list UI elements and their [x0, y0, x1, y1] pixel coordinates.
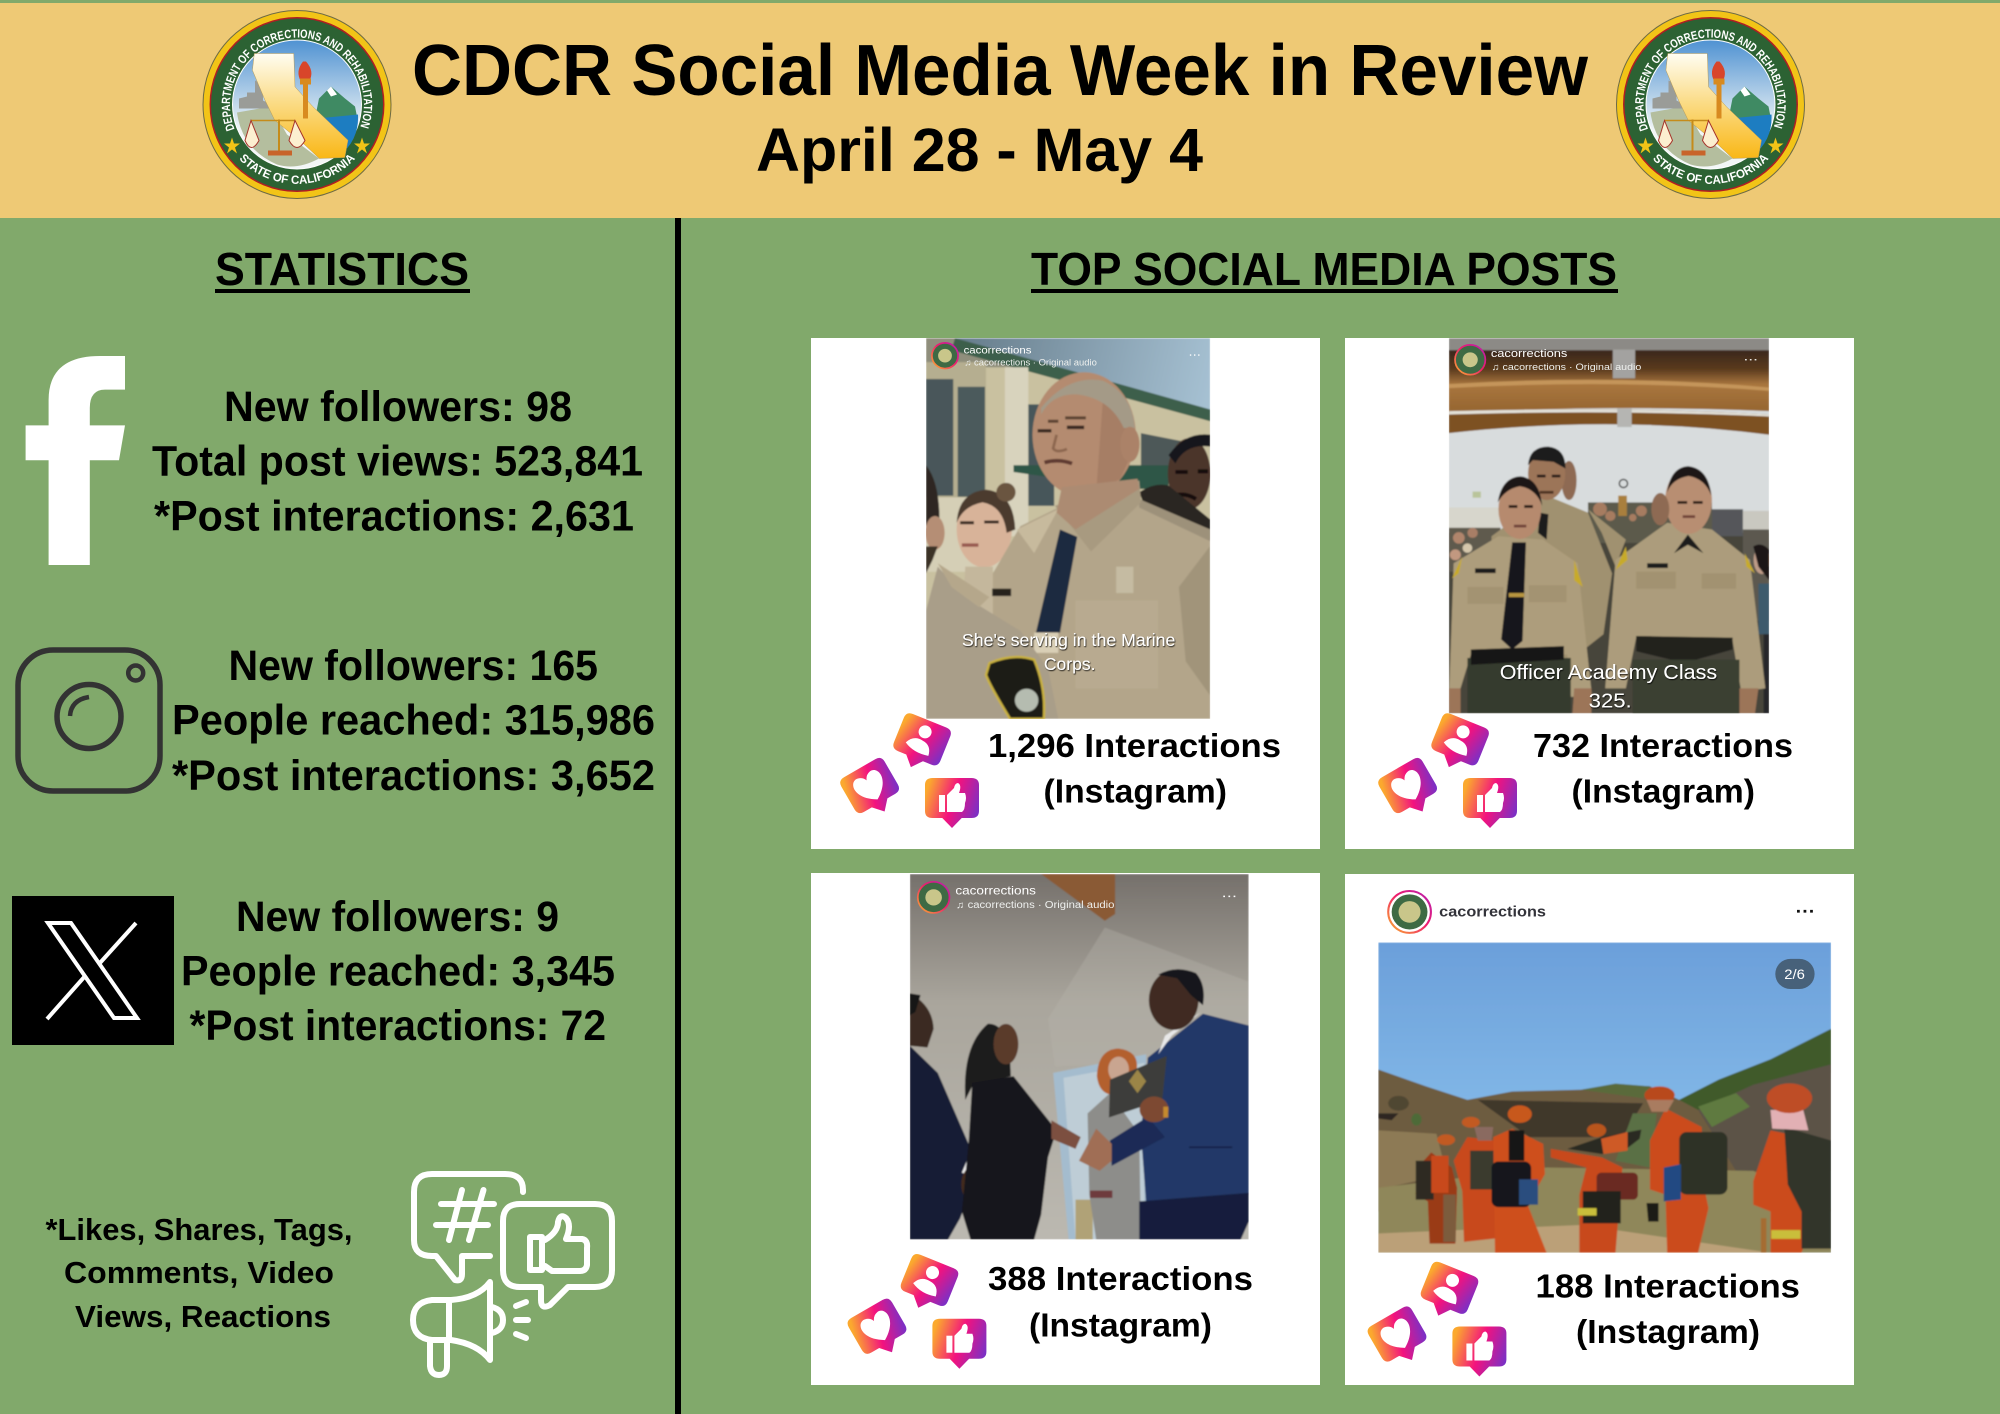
interactions label: 732 Interactions — [1533, 727, 1793, 764]
facebook statistics: *Post interactions: 2,631 — [154, 492, 634, 540]
interactions label — [988, 727, 1281, 810]
panel: post 1 — [811, 338, 1320, 849]
icon: reactions — [838, 711, 979, 828]
photo caption — [962, 630, 1176, 674]
photo header: account name: ♫ cacorrections · Original audio — [964, 358, 1097, 367]
facebook statistics: Total post views: 523,841 — [152, 438, 643, 486]
photo header: account name: cacorrections — [955, 884, 1036, 897]
heading: statistics: STATISTICS — [215, 243, 469, 295]
interactions label: (Instagram) — [1029, 1306, 1212, 1344]
panel: post 2 — [1345, 338, 1854, 849]
X statistics: New followers: 9 — [236, 893, 559, 941]
card background — [1345, 338, 1854, 849]
photo header: account name — [1388, 891, 1813, 933]
interactions label: 188 Interactions — [1536, 1268, 1800, 1304]
photo: certificate presentation — [910, 874, 1249, 1240]
icon: reactions — [845, 1252, 986, 1369]
photo caption: She's serving in the Marine — [962, 630, 1176, 650]
photo caption: Corps. — [1044, 654, 1095, 674]
photo header: account name: ♫ cacorrections · Original audio — [1492, 362, 1641, 373]
icon: X — [12, 896, 174, 1045]
instagram statistics: People reached: 315,986 — [172, 696, 655, 744]
icon: reactions — [1365, 1260, 1506, 1376]
F2 — [1454, 1137, 1495, 1242]
photo header: account name: cacorrections — [1491, 348, 1568, 360]
X statistics — [181, 893, 615, 1050]
photo caption: Officer Academy Class — [1500, 661, 1717, 684]
interactions label: 388 Interactions — [988, 1260, 1253, 1297]
interactions label — [1533, 727, 1793, 810]
instagram statistics: *Post interactions: 3,652 — [172, 752, 655, 800]
heading: top social media posts: TOP SOCIAL MEDIA POSTS — [1031, 243, 1617, 295]
interactions label: (Instagram) — [1572, 772, 1755, 810]
footnote: *Likes, Shares, Tags, — [46, 1212, 352, 1247]
icon: instagram — [18, 650, 160, 791]
card background — [1345, 874, 1854, 1385]
card background — [811, 338, 1320, 849]
logo: CDCR seal left: STATE OF CALIFORNIA — [240, 154, 356, 184]
photo header: account name: cacorrections — [964, 345, 1031, 356]
vertical divider — [675, 218, 681, 1414]
logo: CDCR seal right — [1616, 10, 1805, 199]
F6 — [1752, 1130, 1804, 1253]
panel: post 4 — [1345, 874, 1854, 1385]
interactions label: 1,296 Interactions — [988, 727, 1281, 764]
icon: reactions — [1376, 711, 1517, 828]
footnote: Views, Reactions — [75, 1299, 331, 1334]
logo: CDCR seal right: DEPARTMENT OF CORRECTIONS AND REHABILITATION — [1635, 29, 1786, 132]
photo header: account name: ♫ cacorrections · Original audio — [956, 900, 1115, 911]
photo header: account name: cacorrections — [1439, 903, 1546, 920]
icon: facebook — [26, 356, 125, 565]
photo caption — [1500, 664, 1718, 709]
photo counter badge: 2/6 — [1784, 967, 1805, 982]
panel: post 3 — [811, 873, 1320, 1385]
X statistics: *Post interactions: 72 — [190, 1002, 606, 1050]
card background — [811, 873, 1320, 1385]
date subtitle: April 28 - May 4 — [756, 116, 1203, 184]
icon: social engagement — [413, 1174, 612, 1375]
logo: CDCR seal left: DEPARTMENT OF CORRECTIONS AND REHABILITATION — [222, 29, 372, 132]
interactions label: (Instagram) — [1044, 772, 1227, 810]
logo: CDCR seal right: STATE OF CALIFORNIA — [1654, 154, 1769, 184]
footnote: Comments, Video — [64, 1255, 334, 1290]
F4 — [1551, 1149, 1622, 1253]
photo header: account name — [932, 343, 1200, 369]
X statistics: People reached: 3,345 — [181, 948, 615, 996]
title: CDCR Social Media Week in Review — [412, 31, 1589, 111]
photo: academy class — [1449, 338, 1770, 714]
photo header: account name — [1455, 345, 1756, 375]
interactions label — [1536, 1268, 1800, 1350]
instagram statistics — [172, 642, 655, 800]
logo: CDCR seal left — [202, 10, 392, 199]
photo: officers in uniform — [925, 338, 1211, 719]
photo: fire crew — [1378, 891, 1831, 1253]
photo header: account name — [918, 882, 1235, 913]
F1 — [1424, 1152, 1458, 1244]
photo counter badge — [1775, 959, 1815, 989]
facebook statistics — [152, 383, 643, 540]
F3 — [1493, 1129, 1547, 1253]
header banner — [0, 3, 2000, 218]
interactions label: (Instagram) — [1576, 1313, 1760, 1350]
facebook statistics: New followers: 98 — [224, 383, 572, 431]
interactions label — [988, 1260, 1253, 1344]
footnote — [46, 1212, 352, 1334]
instagram statistics: New followers: 165 — [228, 642, 598, 690]
photo caption: 325. — [1589, 689, 1632, 712]
F5 — [1650, 1108, 1709, 1253]
